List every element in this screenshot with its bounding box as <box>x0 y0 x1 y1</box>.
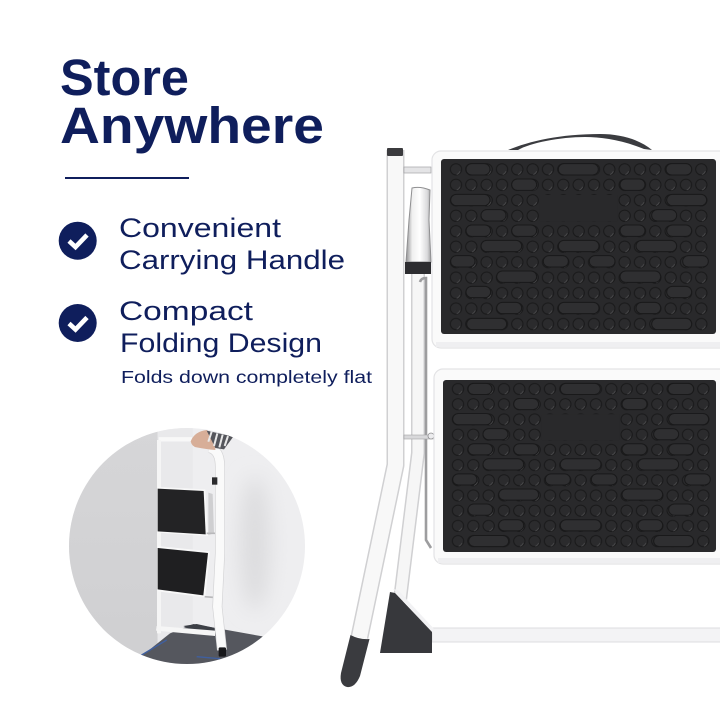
upper step <box>432 151 720 348</box>
caption: folds flat: Folds down completely flat <box>121 367 372 387</box>
title: Store <box>60 49 189 106</box>
bottom crossbar <box>432 628 720 642</box>
icon: check badge <box>59 304 97 342</box>
lower chrome bar <box>404 433 434 439</box>
icon: check badge <box>59 222 97 260</box>
chrome wire <box>420 278 431 548</box>
feature text: folding design: Compact <box>119 296 254 326</box>
tread pattern upper <box>448 162 709 332</box>
rear rail <box>400 272 418 600</box>
lower step <box>434 369 720 564</box>
title <box>60 49 324 154</box>
corner bracket <box>380 589 435 653</box>
feature text: carrying handle: Convenient <box>119 213 282 243</box>
folding latch <box>405 187 431 274</box>
photo: folded stool in circle <box>69 428 305 664</box>
upper chrome bar <box>404 167 431 173</box>
feature text: carrying handle: Carrying Handle <box>119 245 345 275</box>
leg top cap <box>387 148 403 156</box>
step stool product <box>341 134 720 687</box>
handle <box>508 134 652 150</box>
feature: folding design <box>59 296 322 358</box>
rubber foot <box>341 635 370 687</box>
feature text: carrying handle <box>119 213 345 275</box>
feature text: folding design <box>119 296 322 358</box>
front leg <box>360 150 396 637</box>
title: Anywhere <box>60 97 324 154</box>
tread pattern lower <box>450 381 711 549</box>
feature: carrying handle <box>59 213 345 275</box>
feature text: folding design: Folding Design <box>120 328 322 358</box>
